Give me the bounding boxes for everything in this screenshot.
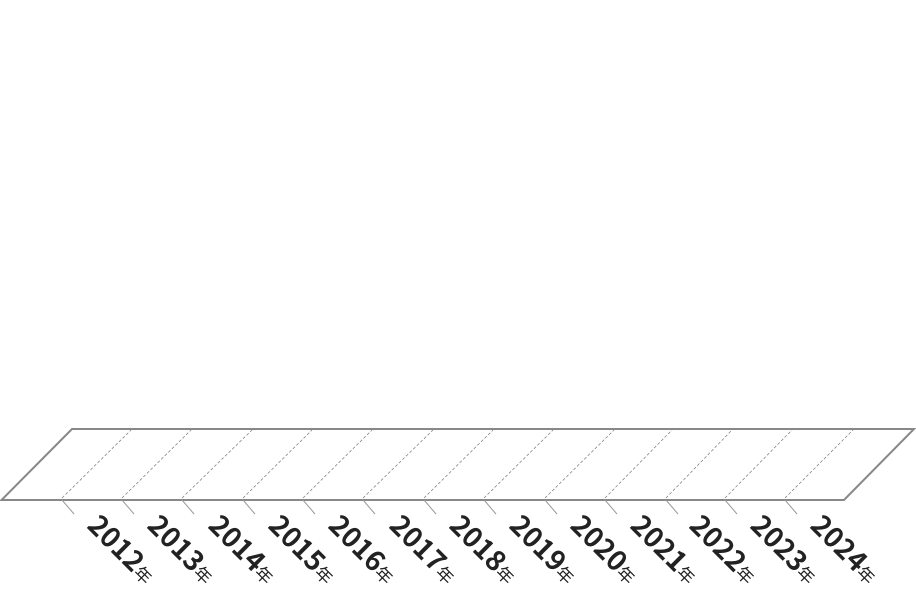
year labels: 2022年: [682, 504, 769, 591]
year labels: 2012年: [80, 504, 167, 591]
year labels: [80, 504, 890, 591]
year labels: 2024年: [803, 504, 890, 591]
year labels: 2017年: [382, 504, 469, 591]
year labels: 2019年: [502, 504, 589, 591]
year labels: 2021年: [623, 504, 710, 591]
year labels: 2018年: [442, 504, 529, 591]
year labels: 2020年: [563, 504, 650, 591]
year labels: 2023年: [743, 504, 830, 591]
year labels: 2015年: [261, 504, 348, 591]
timeline band: [2, 429, 914, 500]
year labels: 2014年: [201, 504, 288, 591]
year ticks: [62, 500, 797, 514]
year labels: 2013年: [140, 504, 227, 591]
year labels: 2016年: [321, 504, 408, 591]
